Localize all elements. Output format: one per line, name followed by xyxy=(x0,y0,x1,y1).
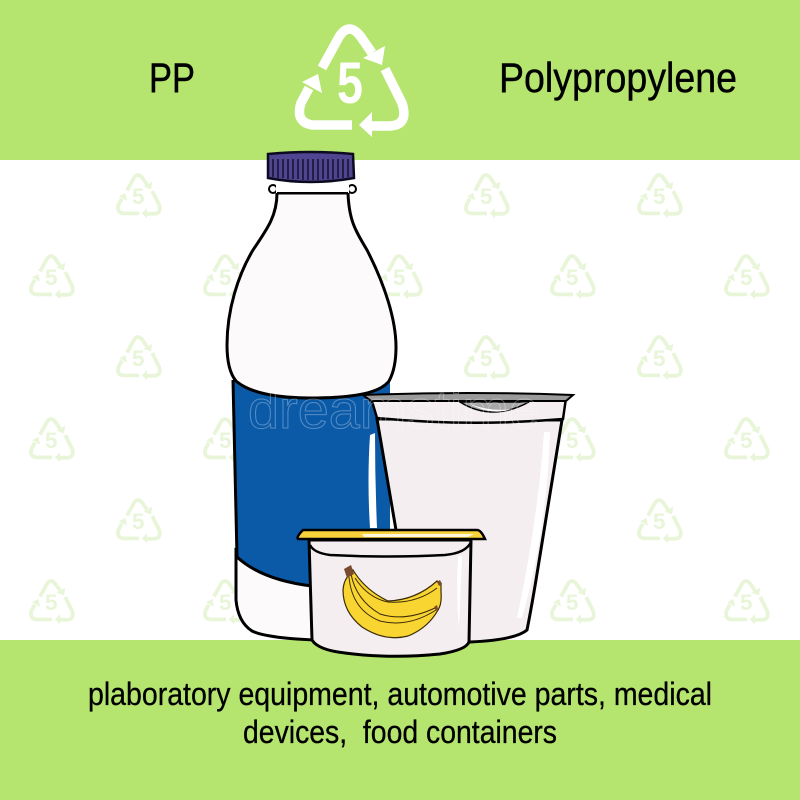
icon: bananas xyxy=(343,565,442,638)
background pattern: small recycling symbols: 5 xyxy=(740,590,752,615)
background pattern: small recycling symbols: 5 xyxy=(393,265,405,290)
background pattern: small recycling symbols: 5 xyxy=(219,265,231,290)
background pattern: small recycling symbols: 5 xyxy=(132,509,144,534)
background pattern: small recycling symbols: 5 xyxy=(219,428,231,453)
cup highlight xyxy=(517,432,550,618)
background pattern: small recycling symbols xyxy=(31,175,768,624)
background pattern: small recycling symbols: 5 xyxy=(132,184,144,209)
bottle cap xyxy=(268,152,354,182)
cup rim xyxy=(371,398,566,423)
text block: uses line 2: devices, food containers xyxy=(243,714,557,750)
icon: recycling symbol 5 xyxy=(299,29,404,137)
heading: PP: PP xyxy=(149,54,195,101)
background pattern: small recycling symbols: 5 xyxy=(480,346,492,371)
text block: uses line 1: plaboratory equipment, automotive parts, medical xyxy=(88,676,712,712)
background pattern: small recycling symbols: 5 xyxy=(566,265,578,290)
cup lid tab xyxy=(460,402,529,412)
bottle upper body xyxy=(227,193,396,398)
background pattern: small recycling symbols: 5 xyxy=(45,590,57,615)
header band xyxy=(0,0,800,160)
heading: Polypropylene: Polypropylene xyxy=(499,54,737,101)
footer band xyxy=(0,640,800,800)
background pattern: small recycling symbols: 5 xyxy=(132,346,144,371)
bottle blue label xyxy=(233,376,390,590)
cup body xyxy=(377,419,562,642)
illustration: yogurt cup xyxy=(363,393,573,642)
tub yellow lid xyxy=(298,530,485,539)
background pattern: small recycling symbols: 5 xyxy=(480,184,492,209)
bottle neck xyxy=(269,182,356,193)
background pattern: small recycling symbols: 5 xyxy=(740,428,752,453)
background pattern: small recycling symbols: 5 xyxy=(219,590,231,615)
illustration: banana tub xyxy=(298,530,485,656)
background pattern: small recycling symbols: 5 xyxy=(653,509,665,534)
background pattern: small recycling symbols: 5 xyxy=(45,428,57,453)
background pattern: small recycling symbols: 5 xyxy=(653,184,665,209)
background pattern: small recycling symbols: 5 xyxy=(740,265,752,290)
background pattern: small recycling symbols: 5 xyxy=(653,346,665,371)
tub body xyxy=(309,540,471,656)
illustration: bottle xyxy=(227,152,400,640)
bottle bottom section xyxy=(236,550,400,640)
background pattern: small recycling symbols: 5 xyxy=(45,265,57,290)
icon: recycling symbol 5: 5 xyxy=(337,51,363,116)
watermark: dreamstime xyxy=(248,380,540,440)
background pattern: small recycling symbols: 5 xyxy=(566,590,578,615)
tub highlight xyxy=(457,556,462,628)
background pattern: small recycling symbols: 5 xyxy=(566,428,578,453)
cup foil lid xyxy=(363,393,573,401)
bottle highlight xyxy=(368,433,377,528)
